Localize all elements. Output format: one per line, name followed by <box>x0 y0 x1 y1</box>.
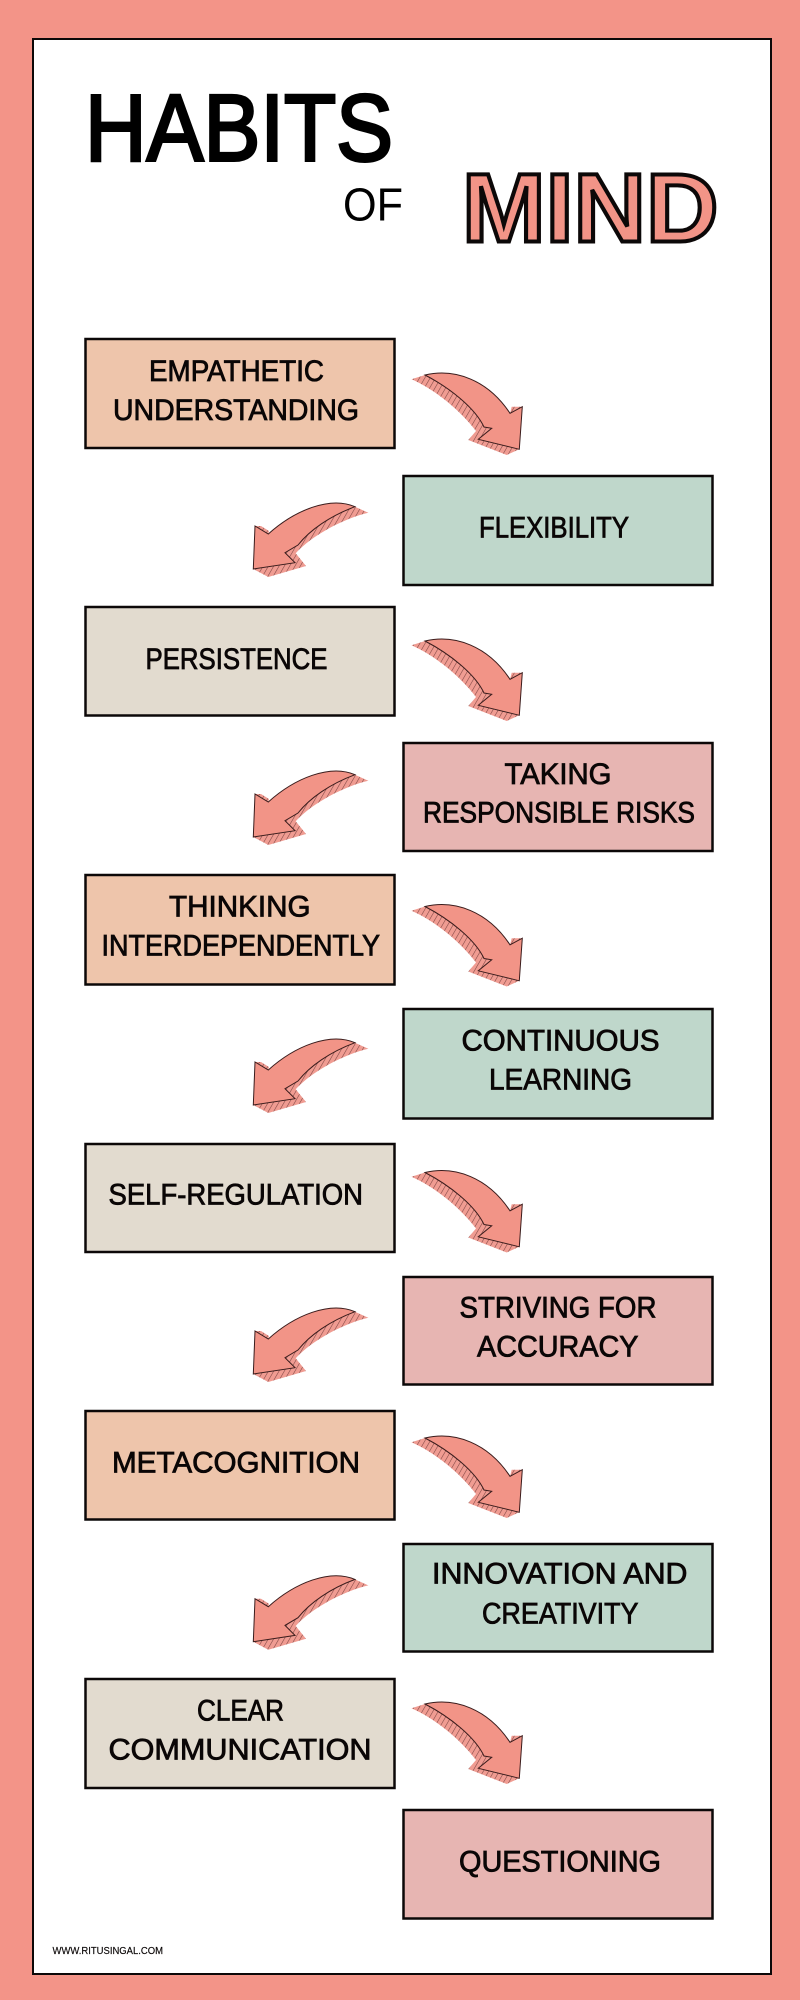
box: persistence <box>86 607 394 716</box>
box: continuous learning <box>404 1009 712 1118</box>
box: empathetic understanding: EMPATHETIC <box>149 355 324 388</box>
arrow: to striving for accuracy <box>412 1171 522 1252</box>
box: clear communication: COMMUNICATION <box>108 1733 372 1766</box>
box: taking responsible risks: TAKING <box>504 758 612 791</box>
footer website credit: WWW.RITUSINGAL.COM <box>52 1946 163 1957</box>
box: metacognition: METACOGNITION <box>112 1447 360 1480</box>
box: self-regulation: SELF-REGULATION <box>108 1179 363 1212</box>
box: innovation and creativity: INNOVATION AND <box>432 1557 688 1590</box>
box: innovation and creativity: CREATIVITY <box>482 1597 639 1630</box>
arrow: to flexibility <box>412 373 522 455</box>
box: continuous learning: CONTINUOUS <box>462 1025 660 1058</box>
box: empathetic understanding: UNDERSTANDING <box>113 394 359 427</box>
box: striving for accuracy: ACCURACY <box>477 1331 639 1364</box>
arrow: to metacognition <box>253 1308 368 1382</box>
box: flexibility: FLEXIBILITY <box>479 511 629 544</box>
arrow: to taking responsible risks <box>412 639 522 721</box>
box: taking responsible risks: RESPONSIBLE RISKS <box>423 797 695 830</box>
box: metacognition <box>86 1411 394 1520</box>
box: continuous learning: LEARNING <box>489 1063 632 1096</box>
box: innovation and creativity <box>404 1544 712 1652</box>
title word: MIND: MIND <box>462 154 718 262</box>
box: striving for accuracy: STRIVING FOR <box>460 1292 656 1325</box>
box: striving for accuracy <box>404 1277 712 1384</box>
box: self-regulation <box>86 1144 394 1252</box>
box: thinking interdependently <box>86 875 394 984</box>
box: clear communication: CLEAR <box>197 1695 284 1728</box>
arrow: to innovation and creativity <box>412 1436 522 1518</box>
box: clear communication <box>86 1679 394 1788</box>
box: thinking interdependently: INTERDEPENDENTLY <box>102 930 380 963</box>
box: questioning: QUESTIONING <box>459 1846 661 1879</box>
arrow: to self-regulation <box>253 1039 368 1113</box>
box: flexibility <box>404 476 712 585</box>
arrow: to continuous learning <box>412 905 522 986</box>
title <box>85 76 718 262</box>
title word: OF: OF <box>343 178 403 230</box>
arrow: to persistence <box>253 503 368 577</box>
box: questioning <box>404 1810 712 1918</box>
arrow: to questioning <box>412 1702 522 1784</box>
box: taking responsible risks <box>404 743 712 851</box>
box: empathetic understanding <box>86 339 394 448</box>
box: thinking interdependently: THINKING <box>169 891 310 924</box>
title word: HABITS: HABITS <box>85 76 393 182</box>
box: persistence: PERSISTENCE <box>146 643 328 676</box>
arrow: to thinking interdependently <box>253 771 368 845</box>
arrow: to clear communication <box>253 1576 368 1650</box>
